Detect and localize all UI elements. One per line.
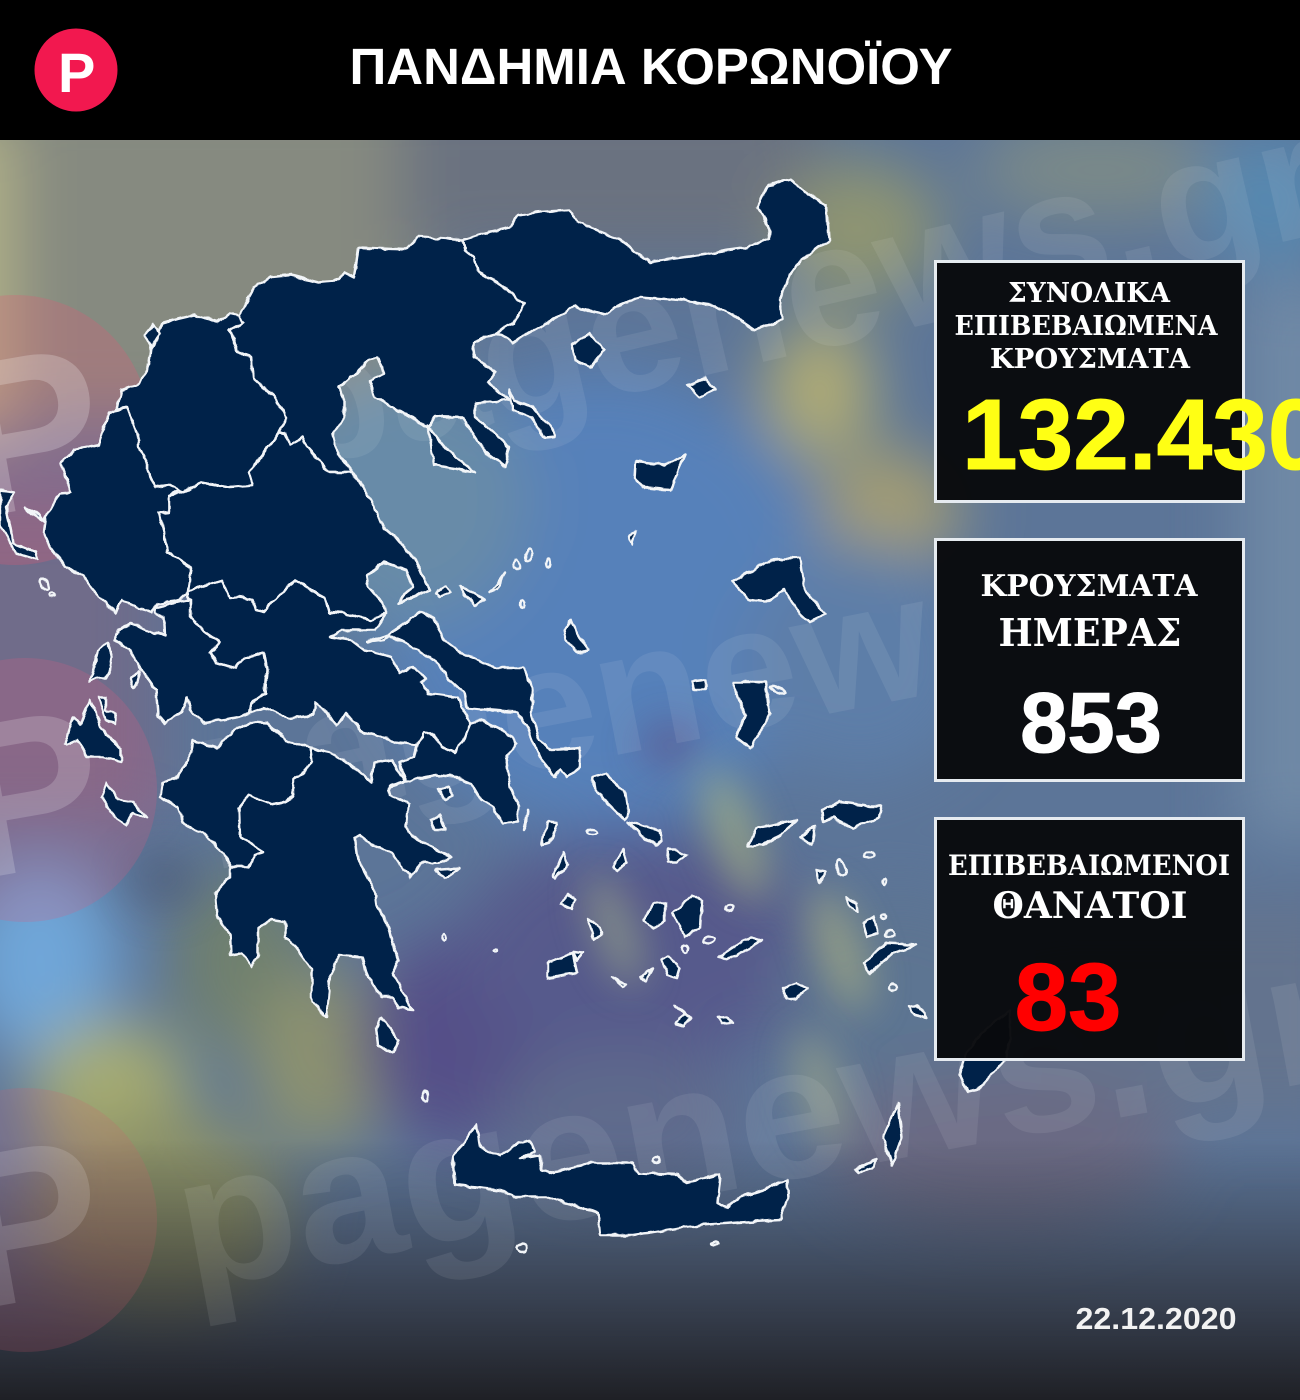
watermark: pagenews.gr text: pagenews.gr — [175, 477, 1262, 872]
heading: daily cases — [980, 569, 1198, 655]
heading: confirmed deaths — [948, 849, 1230, 927]
heading: confirmed deaths: ΕΠΙΒΕΒΑΙΩΜΕΝΟΙ — [948, 849, 1230, 882]
region: Thrace and East Macedonia — [463, 180, 829, 343]
region: Western Greece — [114, 600, 267, 723]
number: deaths: 83 — [1015, 944, 1121, 1051]
watermark: pink logo circles — [0, 295, 157, 1357]
islands: Cyclades and Saronic — [422, 773, 762, 1252]
number: daily cases: 853 — [1020, 676, 1162, 771]
icon: Pagenews logo — [34, 28, 118, 112]
islands: Dodecanese and East Aegean — [748, 802, 1010, 1173]
panel: confirmed deaths — [936, 818, 1244, 1060]
heading: daily cases: ΚΡΟΥΣΜΑΤΑ — [980, 569, 1198, 604]
map of Greece — [0, 180, 1010, 1252]
icon: Pagenews logo: P — [58, 41, 95, 104]
region: Thessaly — [159, 432, 429, 620]
region: Northwest Peloponnese — [160, 722, 312, 867]
heading: confirmed deaths: ΘΑΝΑΤΟΙ — [992, 885, 1188, 927]
region: Attica — [399, 720, 519, 823]
islands: North Aegean — [436, 333, 825, 748]
region: Kassandra peninsula — [427, 425, 475, 472]
watermark: pagenews.gr text — [159, 76, 1300, 1330]
title: ΠΑΝΔΗΜΙΑ ΚΟΡΩΝΟΪΟΥ — [350, 38, 952, 95]
islands: Ionian — [0, 325, 399, 1053]
region: Peloponnese — [215, 747, 451, 1017]
region: Epirus — [44, 408, 191, 613]
region: Central Greece — [188, 580, 471, 753]
region: Crete — [453, 1125, 788, 1235]
heading: daily cases: ΗΜΕΡΑΣ — [998, 610, 1182, 655]
region: Athos peninsula — [509, 390, 555, 438]
header bar — [0, 0, 1300, 140]
heading: total confirmed cases: ΚΡΟΥΣΜΑΤΑ — [990, 344, 1191, 375]
heading: total confirmed cases: ΕΠΙΒΕΒΑΙΩΜΕΝΑ — [954, 311, 1218, 342]
panel: total confirmed cases — [936, 262, 1300, 502]
panel: daily cases — [936, 540, 1244, 780]
region: Central Macedonia — [230, 237, 524, 472]
region: Evia — [367, 612, 580, 777]
region: Western Macedonia — [117, 313, 287, 492]
heading: total confirmed cases: ΣΥΝΟΛΙΚΑ — [1008, 278, 1171, 309]
date: 22.12.2020 — [1076, 1301, 1236, 1336]
heading: total confirmed cases — [954, 278, 1218, 375]
